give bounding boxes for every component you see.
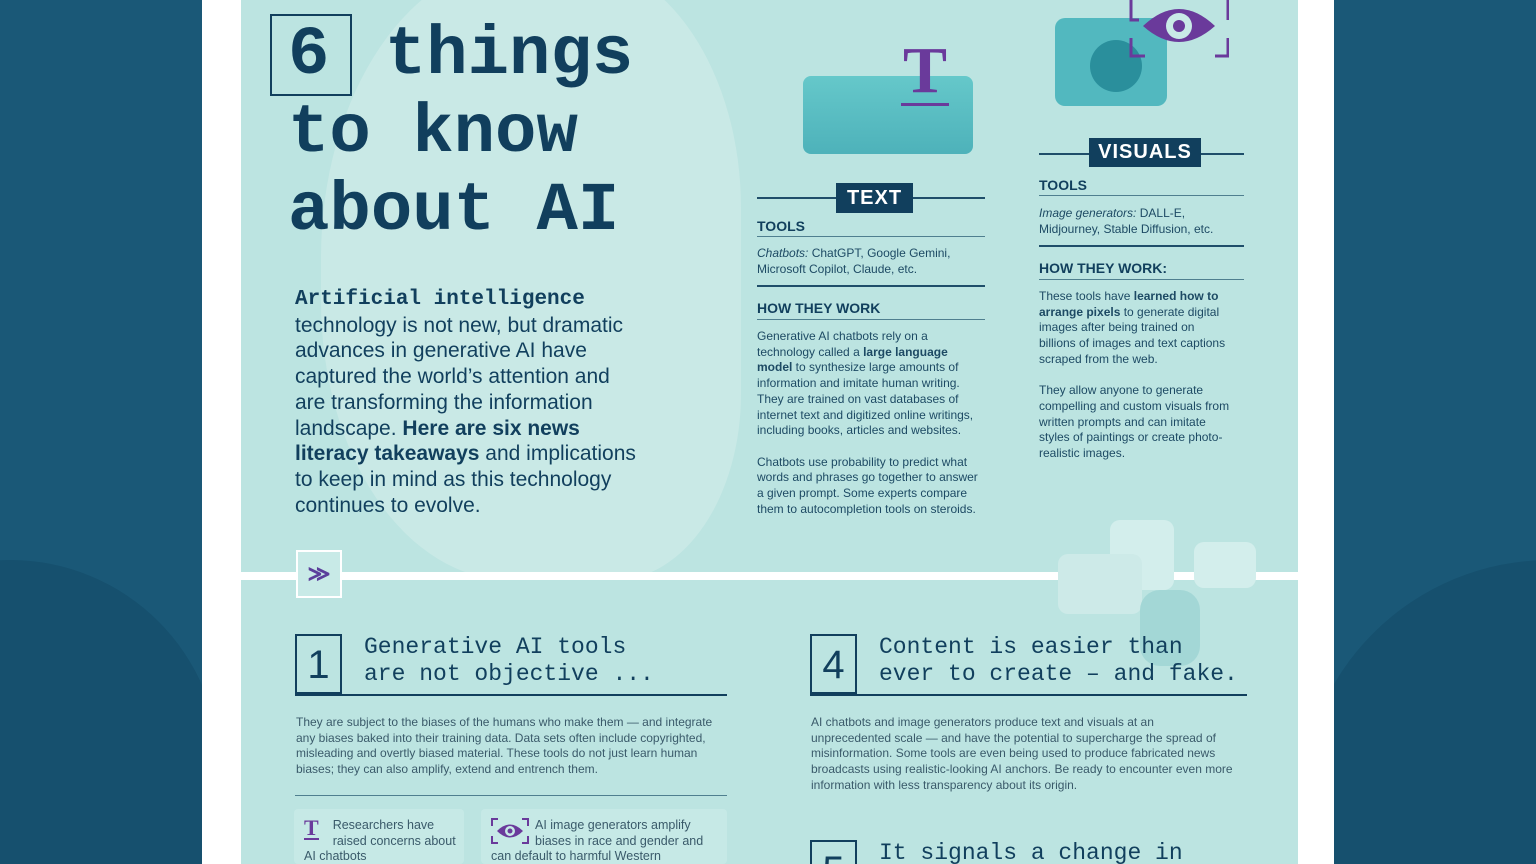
title: 6 things <box>288 16 633 94</box>
icon: keyboard with T <box>803 34 973 154</box>
title <box>270 14 633 250</box>
section 4 heading: 4 <box>822 643 845 687</box>
label: TEXT <box>836 183 913 213</box>
label: TEXT: TEXT <box>847 187 902 209</box>
label: VISUALS <box>1089 138 1201 167</box>
title: about AI <box>288 172 619 250</box>
icon: speech bubbles robot <box>1058 520 1256 666</box>
section 4 text: AI chatbots and image generators produce text and visuals at an unprecedented scale — and have the potential to supercharge the spread of misinformation. Some tools are even being used to produce fabricated news broadcasts using realistic-looking AI anchors. Be ready to encounter even more information with less transparency about its origin. <box>811 715 1233 792</box>
panel: VISUALS column: Image generators: DALL-E, Midjourney, Stable Diffusion, etc. <box>1039 206 1213 236</box>
panel: VISUALS column: HOW THEY WORK: <box>1039 260 1167 276</box>
icon: chevron down <box>296 550 342 598</box>
title: to know <box>288 94 578 172</box>
callout: chatbots: T <box>304 815 319 840</box>
callout: chatbots: Researchers have raised concerns about AI chatbots <box>304 818 456 863</box>
intro text: technology is not new, but dramatic advances in generative AI have captured the world’s attention and are transforming the information landscape. Here are six news literacy takeaways and implications to keep in mind as this technology continues to evolve. <box>295 314 636 517</box>
panel: VISUALS column <box>1039 138 1244 460</box>
section 1 heading: Generative AI tools <box>364 634 626 660</box>
panel: VISUALS column: They allow anyone to generate compelling and custom visuals from written prompts and can imitate styles of paintings or create photo-realistic images. <box>1039 383 1229 460</box>
icon: camera with eye <box>1055 0 1229 106</box>
callout: image generators: AI image generators amplify biases in race and gender and can default to harmful Western <box>491 818 703 863</box>
panel: TEXT column <box>757 183 985 516</box>
panel: TEXT column: Chatbots: ChatGPT, Google Gemini, Microsoft Copilot, Claude, etc. <box>757 246 950 276</box>
section 1 heading: are not objective ... <box>364 661 654 687</box>
panel: VISUALS column: TOOLS <box>1039 177 1087 193</box>
icon: keyboard with T: T <box>903 34 947 107</box>
intro text: Artificial intelligence <box>295 288 585 311</box>
panel: TEXT column: TOOLS <box>757 218 805 234</box>
background circle <box>1300 560 1536 864</box>
panel: TEXT column: HOW THEY WORK <box>757 300 880 316</box>
panel: TEXT column: Generative AI chatbots rely on a technology called a large language model to synthesize large amounts of information and imitate human writing. They are trained on vast databases of internet text and digitized online writings, including books, articles and websites. <box>757 329 973 437</box>
section 4 heading: Content is easier than <box>879 634 1183 660</box>
panel: VISUALS column: These tools have learned how to arrange pixels to generate digital images after being trained on billions of images and text captions scraped from the web. <box>1039 289 1225 366</box>
panel: TEXT column: Chatbots use probability to predict what words and phrases go together to answer a given prompt. Some experts compare them to autocompletion tools on steroids. <box>757 455 978 516</box>
section 1 heading: 1 <box>307 643 330 687</box>
section 4 heading <box>810 634 1247 696</box>
label: VISUALS: VISUALS <box>1098 141 1192 163</box>
panel: top <box>241 0 1298 572</box>
section 4 heading: ever to create – and fake. <box>879 661 1238 687</box>
section 1 heading <box>295 634 727 696</box>
page <box>202 0 1334 864</box>
face silhouette <box>321 0 741 580</box>
panel: bottom <box>241 580 1298 864</box>
icon: chevron down: ≫ <box>307 561 331 586</box>
section 1 text: They are subject to the biases of the humans who make them — and integrate any biases baked into their training data. Data sets often include copyrighted, misleading and overtly biased material. These tools do not just learn human biases; they can also amplify, extend and entrench them. <box>296 715 712 776</box>
